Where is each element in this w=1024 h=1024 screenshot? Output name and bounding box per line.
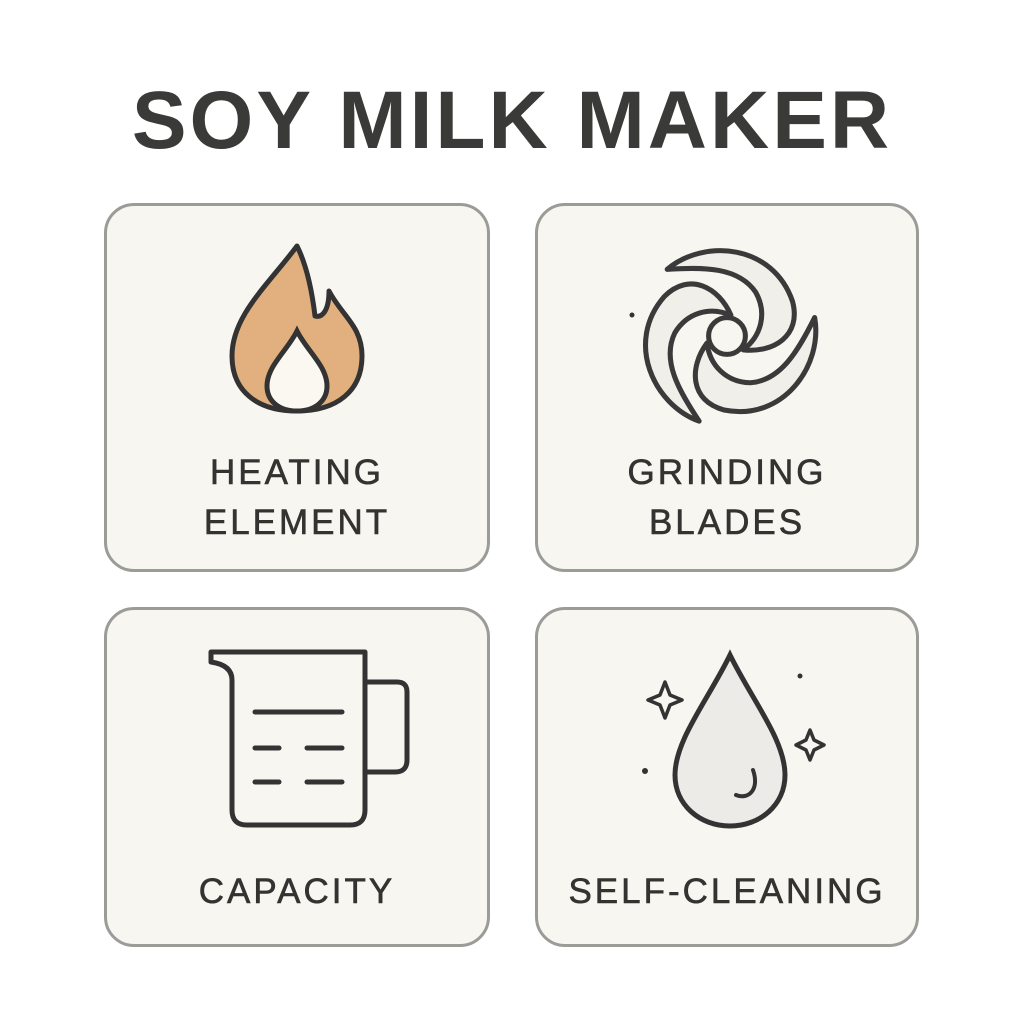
icon: blades bbox=[630, 248, 818, 424]
icon: water drop with sparkles bbox=[642, 649, 826, 828]
panel: self-cleaning bbox=[535, 607, 919, 947]
title: SOY MILK MAKER bbox=[132, 75, 892, 166]
label bbox=[204, 453, 390, 542]
label: ELEMENT bbox=[204, 503, 390, 542]
icon: flame bbox=[230, 244, 364, 414]
label: GRINDING bbox=[628, 453, 826, 492]
label: HEATING bbox=[210, 453, 384, 492]
panel: capacity bbox=[104, 607, 490, 947]
label bbox=[628, 453, 826, 542]
label: CAPACITY bbox=[199, 872, 395, 911]
label: BLADES bbox=[649, 503, 805, 542]
icon: measuring jug bbox=[208, 650, 410, 828]
label: SELF-CLEANING bbox=[568, 872, 886, 911]
panel: heating element bbox=[104, 203, 490, 572]
panel: grinding blades bbox=[535, 203, 919, 572]
